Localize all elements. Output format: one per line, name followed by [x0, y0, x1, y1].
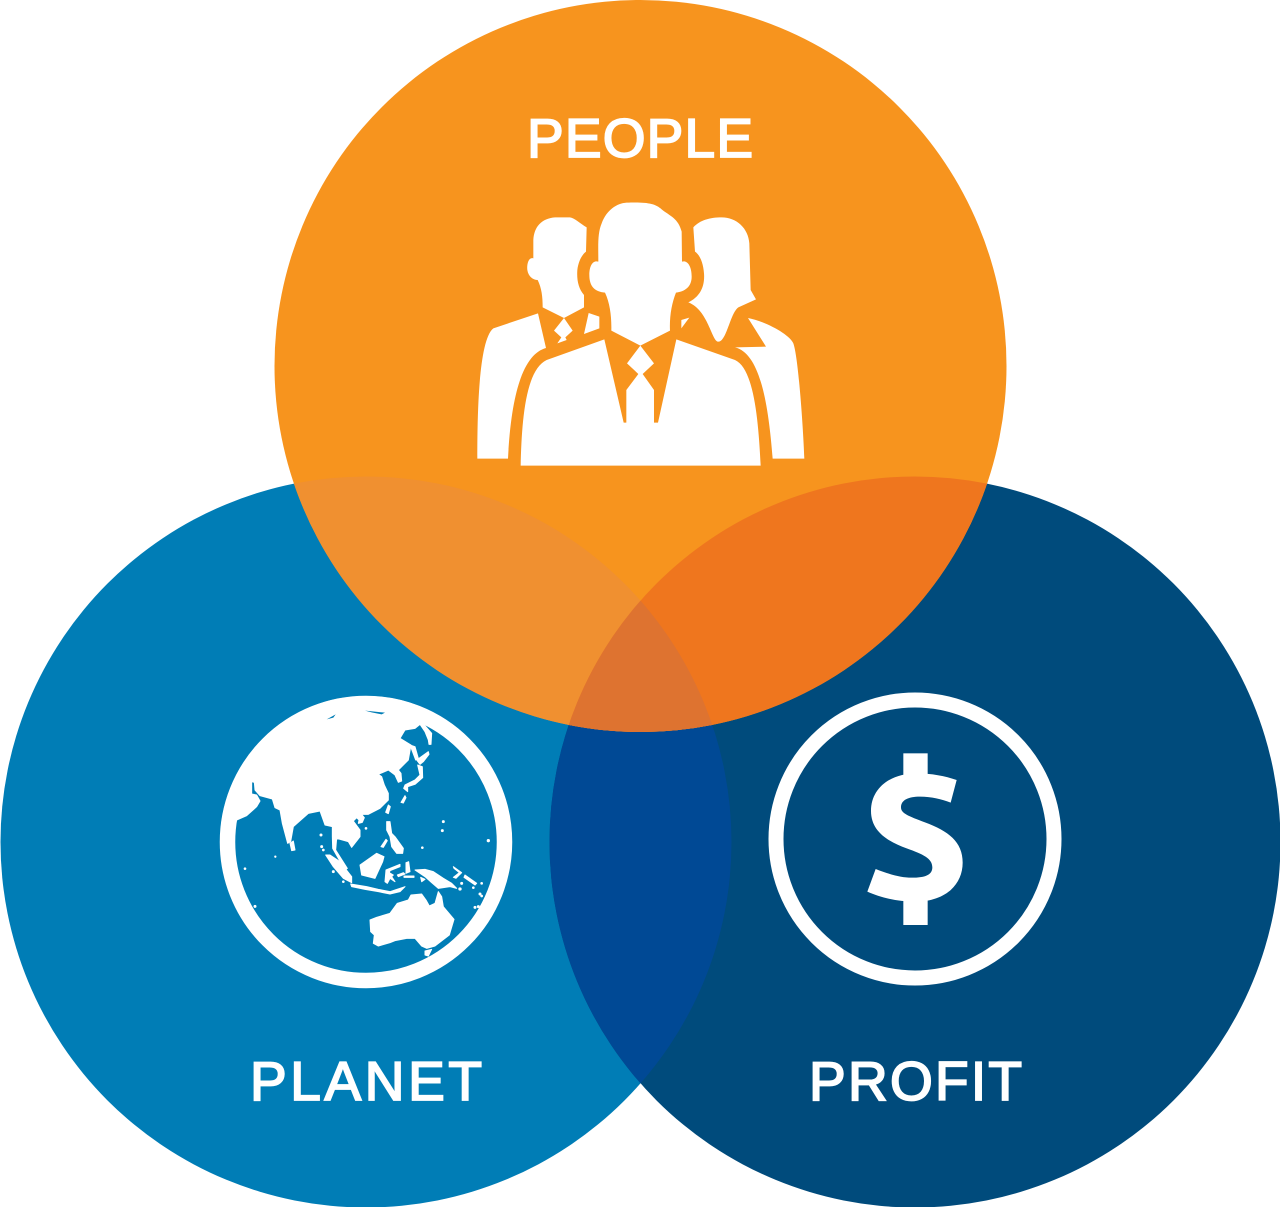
circle: profit: [550, 476, 1280, 1207]
circle: planet: [0, 476, 732, 1207]
icon: dollar coin: [776, 700, 1054, 978]
person: left man: [477, 217, 599, 459]
icon: group of people: [477, 203, 804, 466]
overlap: people and planet: [294, 476, 712, 732]
icon: globe: [205, 685, 505, 980]
overlap: people, planet and profit: [569, 601, 712, 732]
globe ring: [228, 704, 504, 980]
person: centre man: [521, 203, 761, 466]
heading: PEOPLE: PEOPLE: [527, 107, 753, 169]
stray western dots: [244, 856, 276, 907]
southeast asia and australia: [320, 821, 489, 956]
globe land masses: [205, 685, 489, 956]
heading: PROFIT: PROFIT: [809, 1050, 1022, 1112]
dollar symbol drawn as an icon: [867, 753, 963, 925]
circle: people: [274, 0, 1006, 732]
heading: PLANET: PLANET: [250, 1050, 482, 1112]
coin ring: [776, 700, 1054, 978]
person: right woman: [681, 217, 804, 459]
overlap: people and profit: [569, 476, 987, 732]
overlap: planet and profit: [550, 725, 732, 1083]
asia and japan: [220, 696, 432, 870]
